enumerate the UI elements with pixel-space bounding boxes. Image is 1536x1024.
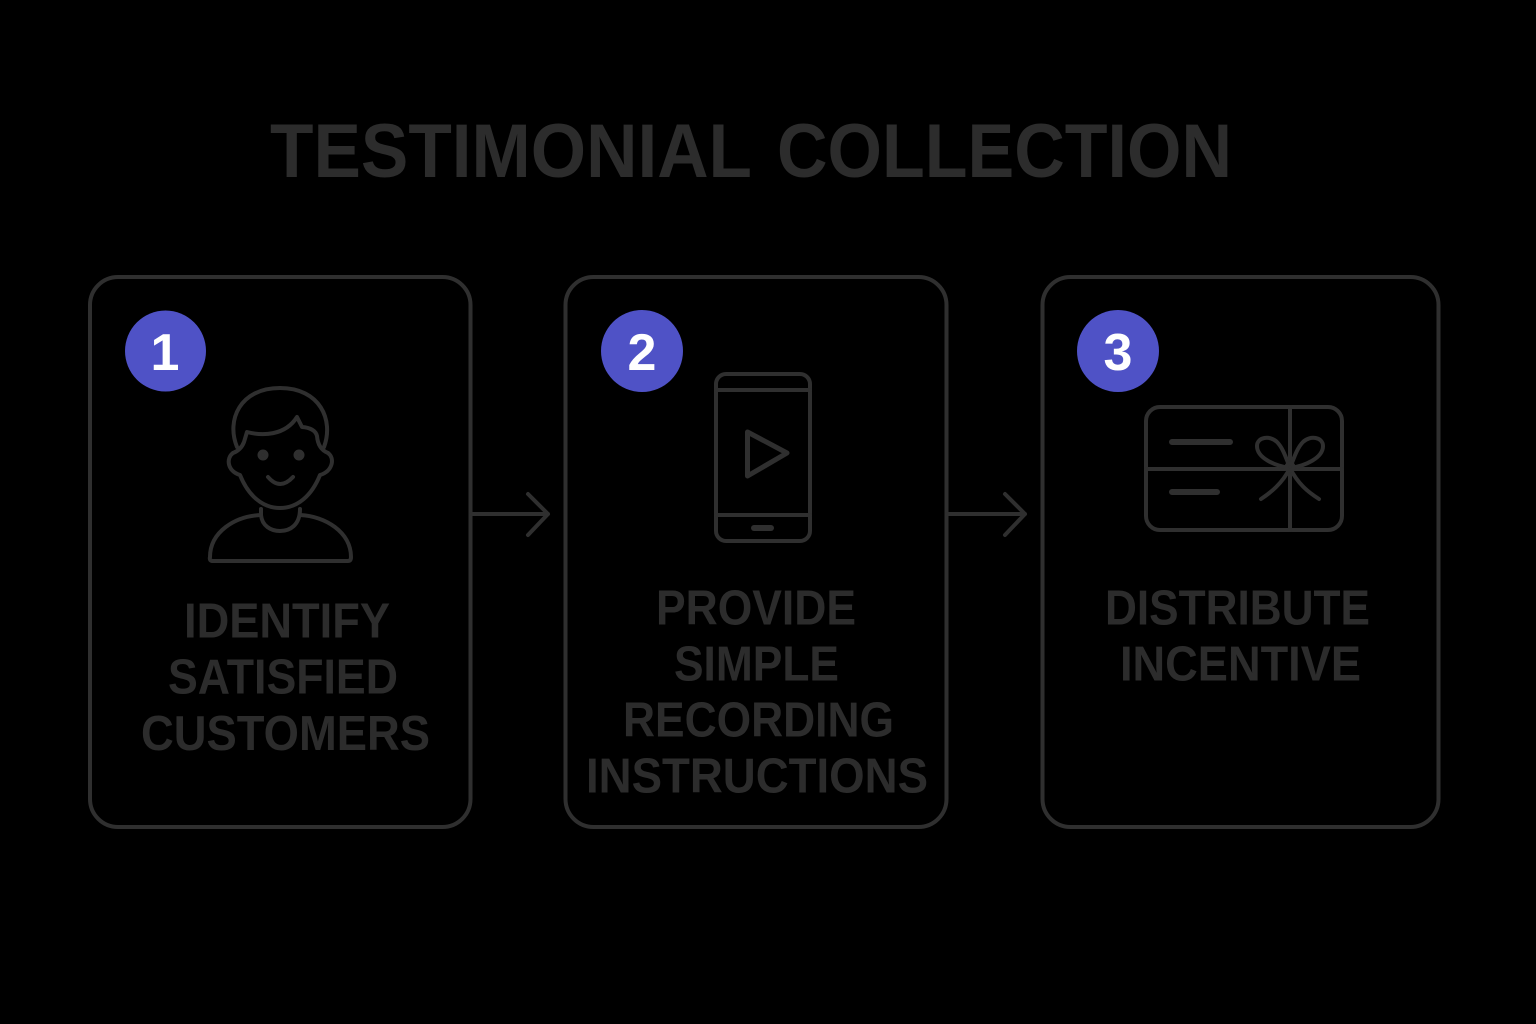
arrow: step 2 to step 3 (947, 494, 1025, 535)
step 2 label: PROVIDE (656, 582, 856, 636)
title (270, 109, 1232, 194)
step 3 label: INCENTIVE (1120, 638, 1361, 692)
card outline 1 (90, 277, 470, 827)
step badge 3: 3 (1104, 324, 1132, 382)
step 3 label: DISTRIBUTE (1105, 582, 1370, 636)
panel: step 2 provide simple recording instructions (566, 277, 946, 827)
title: COLLECTION (777, 109, 1232, 194)
step 1 label: CUSTOMERS (141, 707, 430, 761)
card outline 3 (1042, 277, 1438, 827)
step 2 label (586, 582, 928, 804)
step 1 label (141, 594, 430, 761)
icon: smiling person (210, 388, 351, 561)
step 2 label: SIMPLE (674, 638, 839, 692)
panel: step 1 identify satisfied customers (90, 277, 470, 827)
card outline 2 (566, 277, 946, 827)
step 1 label: IDENTIFY (184, 594, 390, 648)
icon: gift card with bow (1146, 407, 1342, 530)
step 2 label: INSTRUCTIONS (586, 750, 928, 804)
icon: phone with play button (716, 374, 810, 541)
step 2 label: RECORDING (623, 694, 894, 748)
step badge 1: 1 (151, 324, 179, 382)
step 1 label: SATISFIED (168, 650, 398, 704)
step 3 label (1105, 582, 1370, 692)
panel: step 3 distribute incentive (1042, 277, 1438, 827)
step badge 3 (1077, 310, 1159, 392)
arrow: step 1 to step 2 (471, 494, 548, 535)
step badge 2 (601, 310, 683, 392)
step badge 1 (125, 310, 206, 392)
title: TESTIMONIAL (270, 109, 752, 194)
step badge 2: 2 (628, 324, 656, 382)
